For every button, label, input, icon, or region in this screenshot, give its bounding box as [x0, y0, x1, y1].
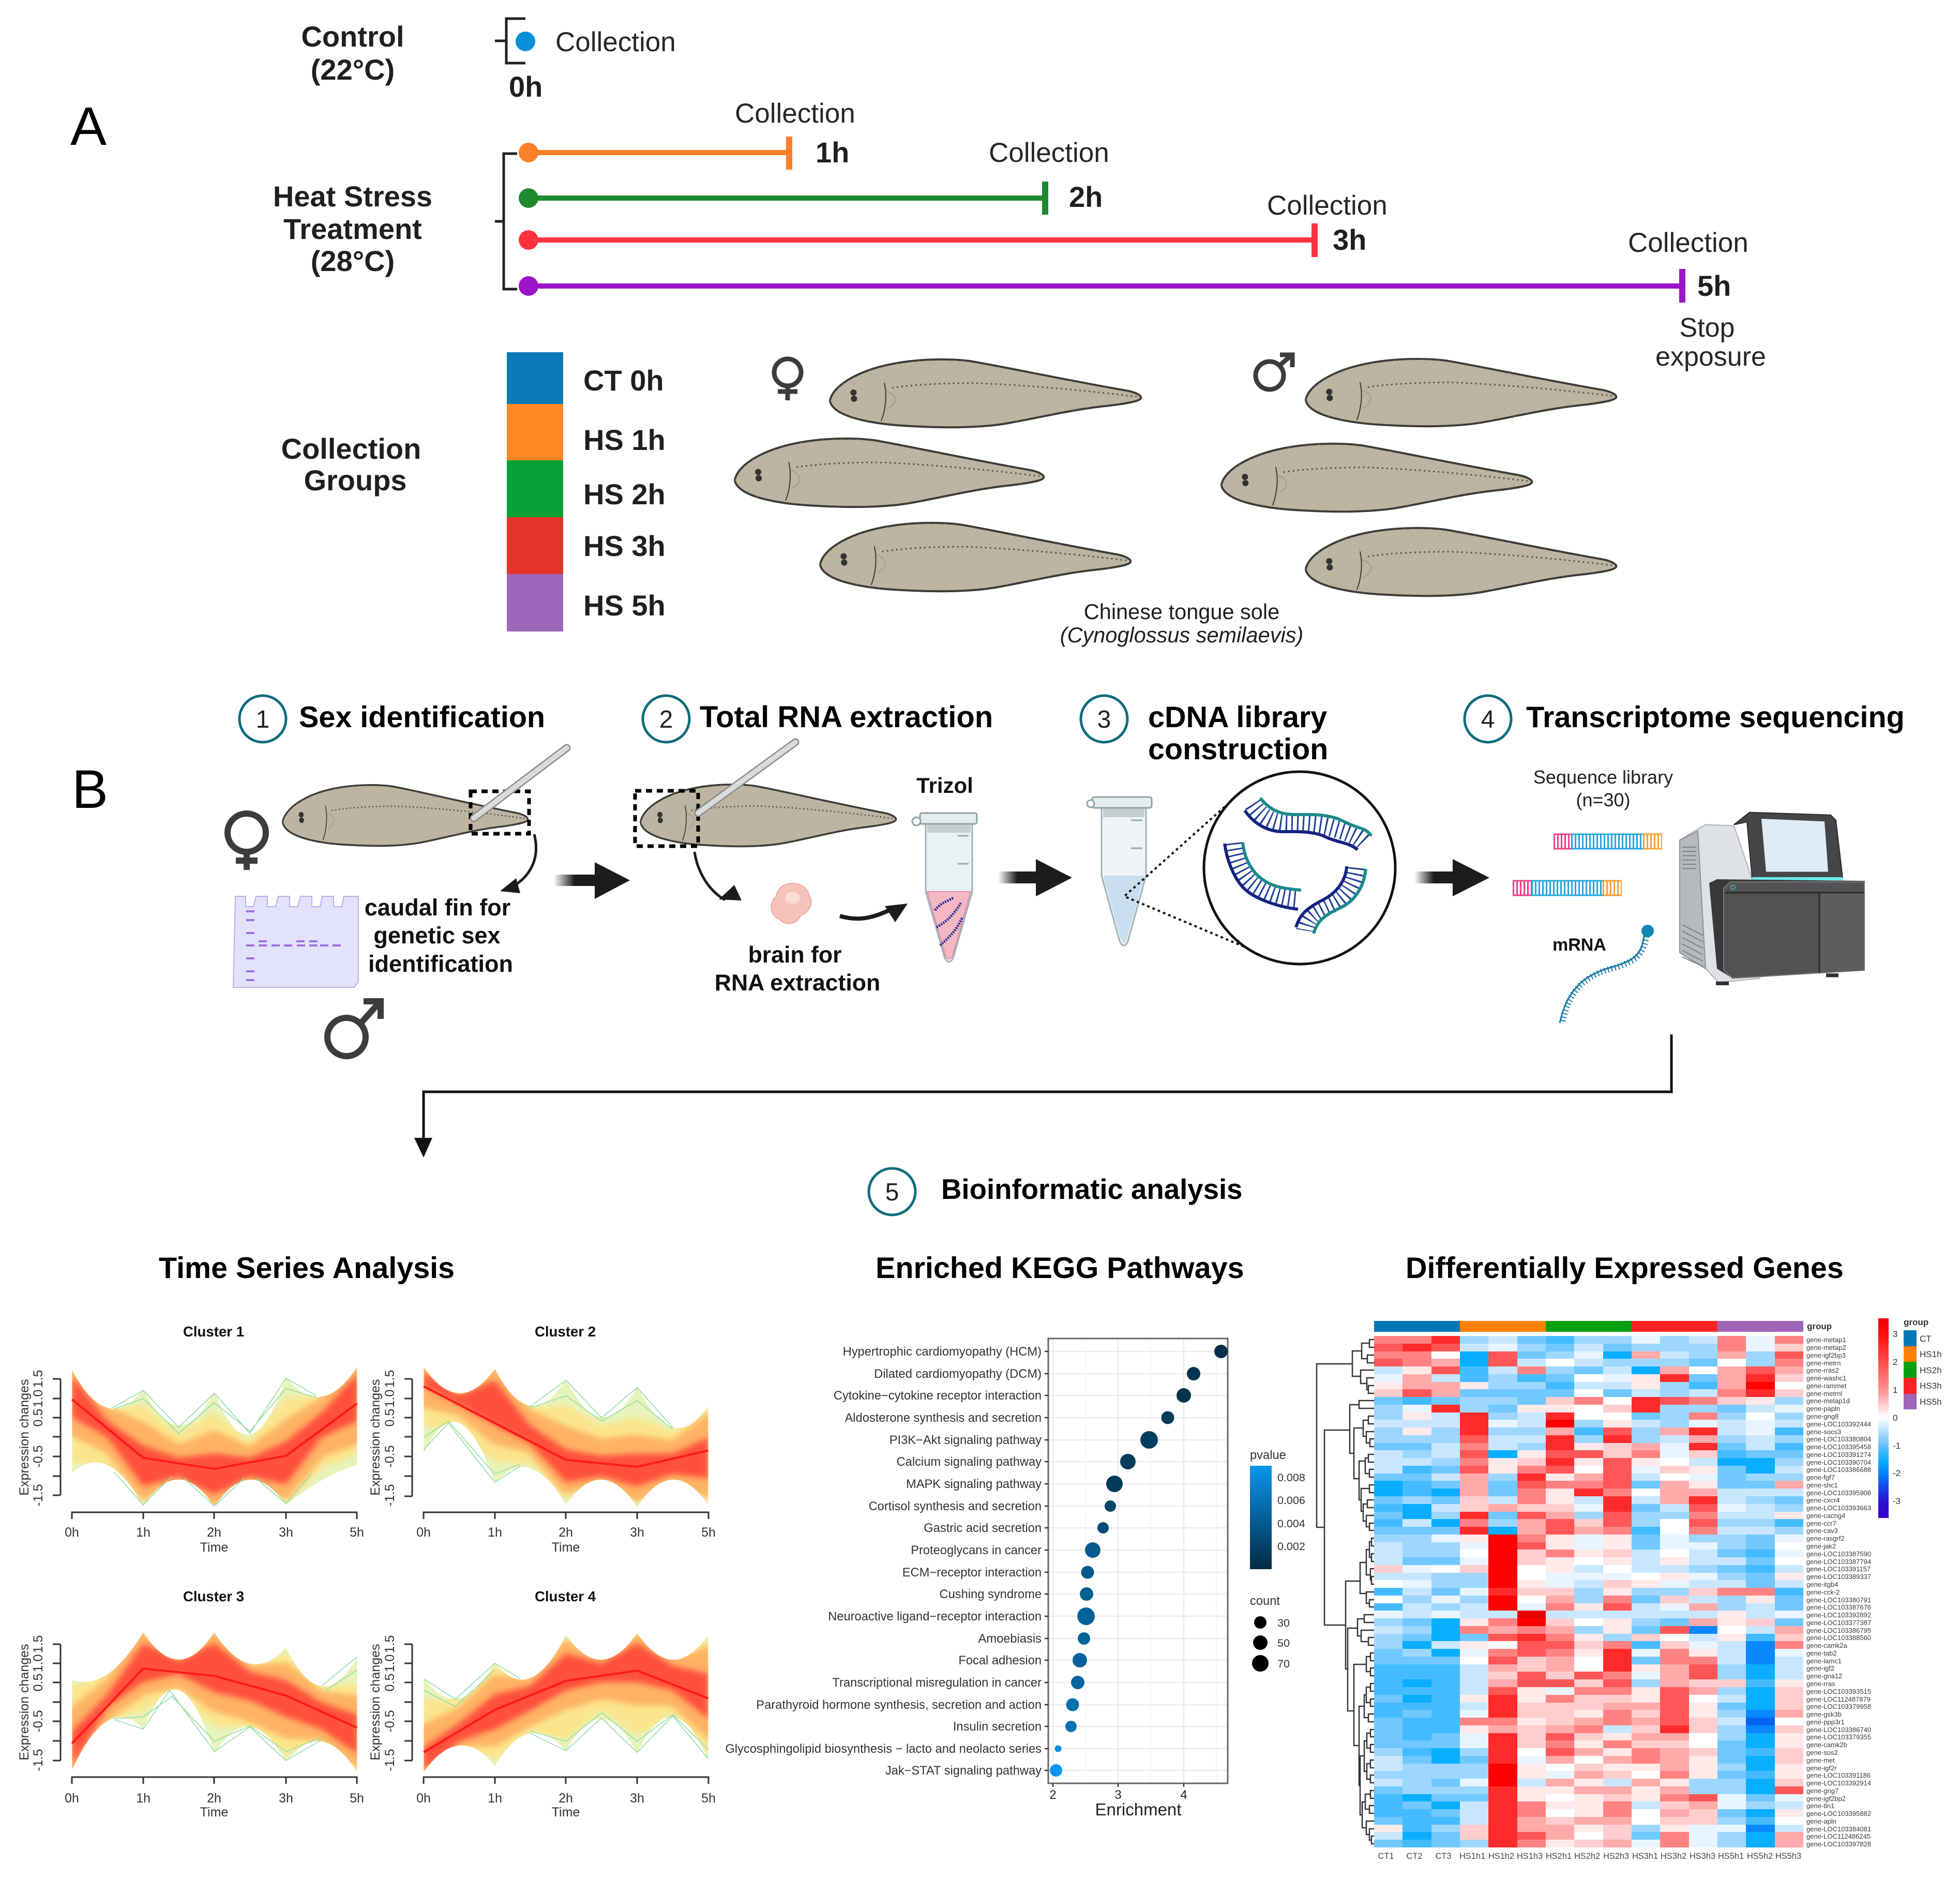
sequence library fragments	[1513, 834, 1662, 895]
chart: cluster 4: 1.5	[383, 1635, 397, 1653]
arrow: brain to tube	[840, 904, 908, 922]
timeline 5h: 5h	[1697, 269, 1731, 302]
heatmap gene labels: gene-socs3	[1806, 1428, 1841, 1436]
chart: cluster 1	[17, 1324, 364, 1555]
heatmap sample labels: HS3h1	[1632, 1852, 1658, 1861]
count legend: count	[1250, 1595, 1280, 1608]
heat stress treatment label: (28°C)	[311, 245, 395, 277]
chart: cluster 3: 5h	[350, 1791, 364, 1806]
fish with caudal fin selection	[283, 748, 567, 846]
chart: cluster 2: 3h	[630, 1525, 644, 1540]
big arrow 2	[998, 859, 1072, 896]
chart: cluster 2: 0.5	[383, 1409, 397, 1426]
chart: cluster 1: 1.5	[31, 1370, 46, 1388]
step 2 heading: Total RNA extraction	[700, 700, 993, 734]
heatmap gene labels: gene-LOC103391157	[1806, 1565, 1871, 1573]
species caption: (Cynoglossus semilaevis)	[1060, 623, 1303, 647]
chart: cluster 4: Time	[552, 1805, 580, 1820]
chart: cluster 3: 0h	[65, 1791, 79, 1806]
heatmap gene labels: gene-LOC103380804	[1806, 1435, 1871, 1443]
heatmap gene labels: gene-cacng4	[1806, 1512, 1845, 1520]
chart: cluster 4: -0.5	[383, 1710, 397, 1733]
heatmap gene labels: gene-shc1	[1806, 1481, 1838, 1489]
KEGG dot plot: Calcium signaling pathway	[897, 1455, 1042, 1469]
chart: cluster 1: Cluster 1	[183, 1324, 244, 1340]
heatmap sample labels: HS1h3	[1517, 1852, 1543, 1861]
chart: cluster 3: 3h	[279, 1791, 293, 1806]
heatmap gene labels: gene-LOC103395882	[1806, 1810, 1871, 1817]
heatmap gene labels: gene-gng7	[1806, 1787, 1838, 1795]
big arrow 1	[554, 862, 630, 899]
heatmap sample labels: CT3	[1436, 1852, 1451, 1861]
brain label: RNA extraction	[715, 970, 880, 996]
trizol label: Trizol	[916, 773, 973, 798]
heatmap gene labels: gene-apln	[1806, 1817, 1836, 1825]
timeline 3h	[519, 190, 1388, 257]
heatmap gene labels: gene-LOC103388560	[1806, 1634, 1871, 1642]
collection groups colour legend: HS 1h	[583, 424, 666, 456]
chart: cluster 4: 1h	[488, 1791, 502, 1806]
heatmap gene labels: gene-LOC103392444	[1806, 1420, 1871, 1428]
chart: cluster 3: 1.0	[31, 1655, 46, 1672]
heatmap group legend	[1904, 1317, 1942, 1409]
heatmap gene labels	[1806, 1336, 1871, 1848]
chart: cluster 4: 5h	[701, 1791, 716, 1806]
icon: trizol tube	[912, 813, 977, 962]
heatmap gene labels: gene-igf2bp3	[1806, 1351, 1846, 1359]
heatmap group legend: group	[1904, 1317, 1928, 1327]
step 1 heading: Sex identification	[299, 701, 545, 734]
count legend: 30	[1277, 1617, 1290, 1629]
icon: cDNA tube	[1087, 797, 1152, 945]
heatmap sample labels	[1378, 1852, 1801, 1861]
heatmap group legend: HS1h	[1920, 1349, 1942, 1359]
arrow: fin to gel	[500, 834, 536, 893]
KEGG dot plot	[725, 1339, 1228, 1819]
chart: cluster 4: 0h	[416, 1791, 431, 1806]
icon: mRNA strand	[1560, 925, 1654, 1023]
chart: cluster 4: -1.5	[383, 1749, 397, 1771]
heatmap gene labels: gene-papln	[1806, 1405, 1840, 1412]
heatmap gene labels: gene-tab2	[1806, 1649, 1837, 1657]
icon: female symbol stem	[778, 386, 797, 400]
zoom circle with cDNA strands	[1204, 772, 1395, 964]
KEGG dot plot: Proteoglycans in cancer	[911, 1544, 1042, 1557]
panel letter B: B	[72, 759, 108, 820]
chart: cluster 1: -0.5	[31, 1445, 46, 1468]
heatmap gene labels: gene-metap1d	[1806, 1397, 1850, 1405]
gel electrophoresis	[233, 896, 358, 987]
KEGG dot plot: Cortisol synthesis and secretion	[869, 1500, 1042, 1513]
chart: cluster 2: Cluster 2	[535, 1324, 596, 1340]
panel letter A: A	[70, 96, 107, 157]
KEGG dot plot: Parathyroid hormone synthesis, secretion and action	[756, 1698, 1042, 1712]
step 1 heading	[239, 696, 545, 742]
chart: cluster 2: 0h	[416, 1525, 431, 1540]
heatmap gene labels: gene-camk2a	[1806, 1642, 1848, 1649]
count legend: 70	[1277, 1658, 1290, 1670]
stop exposure note: Stop	[1680, 313, 1735, 343]
heatmap gene labels: gene-LOC103387794	[1806, 1558, 1871, 1566]
KEGG dot plot: Cushing syndrome	[939, 1588, 1042, 1601]
chart: cluster 2: Time	[552, 1540, 580, 1555]
heatmap gene labels: gene-LOC103392914	[1806, 1779, 1871, 1787]
chart: cluster 3	[17, 1588, 364, 1820]
timeline 1h: 1h	[816, 136, 849, 169]
heatmap gene labels: gene-LOC103393515	[1806, 1688, 1871, 1695]
timeline 3h: Collection	[1267, 190, 1388, 221]
chart: cluster 2: 1h	[488, 1525, 502, 1540]
timeline 3h: 3h	[1333, 223, 1366, 256]
step 4 heading: Transcriptome sequencing	[1526, 701, 1905, 734]
heatmap colour scale: -3	[1893, 1496, 1901, 1506]
heatmap gene labels: gene-metrn	[1806, 1359, 1841, 1367]
chart: cluster 4: 0.5	[383, 1674, 397, 1691]
chart: cluster 1: 1h	[136, 1525, 150, 1540]
caudal fin label: identification	[368, 951, 513, 977]
heatmap gene labels: gene-gsk3b	[1806, 1710, 1842, 1718]
chart: cluster 3: 1.5	[31, 1635, 46, 1653]
heatmap gene labels: gene-LOC103389337	[1806, 1573, 1871, 1581]
heatmap gene labels: gene-LOC103384081	[1806, 1825, 1871, 1833]
KEGG dot plot: Aldosterone synthesis and secretion	[845, 1411, 1042, 1425]
KEGG dot plot: Transcriptional misregulation in cancer	[832, 1676, 1042, 1690]
KEGG dot plot: ECM−receptor interaction	[902, 1566, 1042, 1580]
timeline 2h	[519, 138, 1109, 215]
heatmap colour scale: 0	[1893, 1413, 1897, 1423]
heatmap gene labels: gene-cck-2	[1806, 1588, 1840, 1596]
KEGG dot plot: 2	[1049, 1788, 1057, 1802]
DEG title: Differentially Expressed Genes	[1406, 1252, 1844, 1285]
KEGG dot plot: Insulin secretion	[953, 1720, 1042, 1734]
heatmap group legend: HS5h	[1920, 1397, 1942, 1407]
timeline 5h	[519, 228, 1748, 303]
fish with brain selection	[635, 742, 896, 846]
KEGG dot plot: Hypertrophic cardiomyopathy (HCM)	[843, 1345, 1042, 1359]
heatmap gene labels: gene-ccr7	[1806, 1520, 1836, 1527]
chart: cluster 3: Cluster 3	[183, 1588, 244, 1604]
chart: cluster 4: 2h	[559, 1791, 573, 1806]
heatmap gene labels: gene-LOC103395906	[1806, 1489, 1871, 1497]
icon: male symbol	[1256, 355, 1292, 389]
heatmap colour scale: 1	[1893, 1385, 1897, 1395]
count legend: 50	[1277, 1637, 1290, 1649]
control timeline: Collection	[555, 27, 676, 57]
chart: cluster 4: 3h	[630, 1791, 644, 1806]
chart: cluster 1: Expression changes	[17, 1379, 32, 1496]
heatmap gene labels: gene-LOC103387676	[1806, 1603, 1871, 1611]
control timeline	[495, 19, 676, 103]
caudal fin label: genetic sex	[373, 922, 501, 949]
control group label: (22°C)	[311, 53, 395, 86]
heatmap sample labels: HS1h2	[1488, 1852, 1514, 1861]
step 3 heading	[1081, 696, 1328, 766]
chart: cluster 4: Expression changes	[368, 1644, 383, 1761]
collection groups colour legend: HS 3h	[583, 530, 666, 562]
big arrow 3	[1414, 859, 1489, 896]
heatmap colour scale: -2	[1893, 1468, 1901, 1478]
heat stress treatment label: Heat Stress	[273, 180, 432, 213]
species caption: Chinese tongue sole	[1084, 599, 1279, 624]
brain label: brain for	[748, 942, 841, 968]
timeline 1h: Collection	[735, 98, 855, 129]
heatmap gene labels: gene-sos2	[1806, 1749, 1838, 1756]
panel B: workflow	[72, 696, 1905, 1056]
chart: cluster 2: 1.0	[383, 1390, 397, 1407]
collection groups label: Collection	[281, 432, 421, 465]
control timeline: 0h	[509, 70, 542, 103]
p-value legend: 0.006	[1277, 1494, 1305, 1507]
heatmap colour scale: 3	[1893, 1329, 1897, 1339]
heatmap sample labels: CT1	[1378, 1852, 1394, 1861]
chart: cluster 2: -1.5	[383, 1484, 397, 1507]
icon: male symbol large	[327, 1001, 381, 1056]
control group label: Control	[301, 20, 404, 53]
icon: sequencer machine	[1680, 813, 1865, 985]
KEGG dot plot: Focal adhesion	[958, 1654, 1042, 1667]
heatmap gene labels: gene-LOC103391274	[1806, 1451, 1871, 1459]
heatmap gene labels: gene-LOC103390704	[1806, 1459, 1871, 1466]
collection groups label: Groups	[304, 464, 407, 497]
heatmap gene labels: gene-met	[1806, 1756, 1835, 1764]
heatmap gene labels: gene-gna12	[1806, 1672, 1842, 1680]
count legend	[1250, 1595, 1290, 1672]
heatmap gene labels: gene-LOC103397828	[1806, 1840, 1871, 1848]
chart: cluster 3: -1.5	[31, 1749, 46, 1771]
heatmap sample labels: HS2h1	[1546, 1852, 1572, 1861]
p-value legend: 0.008	[1277, 1471, 1305, 1484]
chart: cluster 1: 0h	[65, 1525, 79, 1540]
heatmap gene labels: gene-cav3	[1806, 1527, 1838, 1535]
heatmap gene labels: gene-LOC103387590	[1806, 1550, 1871, 1558]
heatmap gene labels: gene-ppp3r1	[1806, 1718, 1845, 1726]
heatmap gene labels: gene-LOC103379355	[1806, 1733, 1871, 1741]
KEGG dot plot: PI3K−Akt signaling pathway	[889, 1434, 1042, 1447]
heatmap sample labels: HS5h3	[1775, 1852, 1801, 1861]
heatmap gene labels: gene-igf2r	[1806, 1764, 1837, 1772]
heatmap gene labels: gene-LOC103386795	[1806, 1627, 1871, 1634]
chart: cluster 1: 3h	[279, 1525, 293, 1540]
heatmap gene labels: gene-LOC103392892	[1806, 1611, 1871, 1619]
chart: cluster 3: Time	[200, 1805, 228, 1820]
male fish group	[1222, 359, 1616, 596]
heatmap gene labels: gene-jak2	[1806, 1542, 1836, 1550]
heatmap gene labels: gene-LOC103386740	[1806, 1726, 1871, 1734]
heatmap gene labels: gene-lamc1	[1806, 1657, 1842, 1665]
chart: cluster 2: Expression changes	[368, 1379, 383, 1496]
heatmap cells	[1374, 1336, 1803, 1847]
p-value legend: pvalue	[1250, 1449, 1286, 1462]
heatmap gene labels: gene-gng8	[1806, 1412, 1838, 1420]
heatmap gene labels: gene-metap1	[1806, 1336, 1846, 1344]
heatmap gene labels: gene-LOC103379958	[1806, 1703, 1871, 1710]
KEGG dot plot: Cytokine−cytokine receptor interaction	[834, 1389, 1042, 1403]
sequence library label: (n=30)	[1576, 789, 1631, 810]
heatmap sample labels: CT2	[1407, 1852, 1422, 1861]
heatmap gene labels: gene-itgb4	[1806, 1581, 1838, 1588]
stop exposure note: exposure	[1655, 342, 1766, 372]
KEGG dot plot: Gastric acid secretion	[924, 1522, 1042, 1535]
chart: cluster 1: 1.0	[31, 1390, 46, 1407]
timeline 2h: 2h	[1069, 181, 1103, 213]
timeline 2h: Collection	[989, 138, 1109, 168]
chart: cluster 2: 2h	[559, 1525, 573, 1540]
heatmap group annotation bar	[1374, 1321, 1832, 1332]
chart: cluster 3: Expression changes	[17, 1644, 32, 1761]
heatmap gene labels: gene-LOC112486245	[1806, 1832, 1871, 1840]
heatmap gene labels: gene-rammet	[1806, 1382, 1847, 1390]
collection groups colour legend: CT 0h	[583, 364, 664, 397]
heatmap colour scale: -1	[1893, 1441, 1901, 1451]
heatmap gene labels: gene-fgf7	[1806, 1474, 1835, 1481]
panel A: experimental design	[70, 19, 1766, 647]
chart: cluster 4: Cluster 4	[535, 1588, 596, 1604]
step 5 heading: Bioinformatic analysis	[941, 1174, 1243, 1205]
step 5 heading	[869, 1168, 1243, 1215]
heatmap dendrogram	[1317, 1340, 1374, 1844]
connector arrow to bioinformatic analysis	[414, 1034, 1671, 1158]
collection groups colour legend	[507, 352, 666, 632]
timeline 5h: Collection	[1628, 228, 1748, 258]
KEGG dot plot: 3	[1114, 1788, 1122, 1802]
heatmap gene labels: gene-tln1	[1806, 1802, 1834, 1810]
chart: cluster 2: 1.5	[383, 1370, 397, 1388]
chart: cluster 4: 1.0	[383, 1655, 397, 1672]
heatmap gene labels: gene-cxcr4	[1806, 1496, 1840, 1504]
heatmap gene labels: gene-LOC103386688	[1806, 1466, 1871, 1474]
step 2 heading: 2	[659, 706, 673, 733]
chart: cluster 1: -1.5	[31, 1484, 46, 1507]
step 5 heading: 5	[885, 1179, 899, 1206]
KEGG dot plot: Dilated cardiomyopathy (DCM)	[874, 1367, 1042, 1381]
heatmap colour scale	[1878, 1318, 1901, 1518]
heatmap gene labels: gene-LOC103377387	[1806, 1619, 1871, 1627]
heatmap sample labels: HS2h3	[1603, 1852, 1629, 1861]
step 1 heading: 1	[256, 706, 269, 733]
heatmap group legend: HS3h	[1920, 1381, 1942, 1391]
chart: cluster 1: 2h	[207, 1525, 221, 1540]
step 3 heading: cDNA library	[1148, 701, 1327, 734]
chart: cluster 4	[368, 1588, 717, 1820]
caudal fin label: caudal fin for	[365, 894, 510, 921]
KEGG dot plot: Enrichment	[1095, 1800, 1181, 1819]
heatmap sample labels: HS3h2	[1661, 1852, 1686, 1861]
zoom lines	[1124, 807, 1251, 950]
heatmap gene labels: gene-metap2	[1806, 1344, 1846, 1351]
collection groups colour legend: HS 2h	[583, 478, 666, 510]
heatmap sample labels: HS2h2	[1574, 1852, 1600, 1861]
chart: cluster 3: 2h	[207, 1791, 221, 1806]
chart: cluster 2: 5h	[701, 1525, 716, 1540]
heatmap gene labels: gene-metrnl	[1806, 1390, 1842, 1397]
chart: cluster 3: -0.5	[31, 1710, 46, 1733]
heatmap group legend: HS2h	[1920, 1365, 1942, 1375]
heatmap gene labels: gene-LOC112487879	[1806, 1695, 1871, 1703]
icon: female ring	[774, 359, 801, 386]
heatmap sample labels: HS1h1	[1459, 1852, 1485, 1861]
sequence library label: Sequence library	[1533, 766, 1673, 788]
heatmap colour scale: 2	[1893, 1357, 1897, 1367]
chart: cluster 2	[368, 1324, 717, 1555]
heatmap gene labels: gene-rasgrf2	[1806, 1535, 1845, 1542]
icon: brain tissue	[771, 883, 811, 924]
p-value legend	[1250, 1449, 1305, 1569]
heat stress bracket	[495, 154, 517, 289]
step 4 heading: 4	[1481, 706, 1495, 733]
time series title: Time Series Analysis	[159, 1252, 455, 1285]
heatmap gene labels: gene-rras	[1806, 1680, 1835, 1688]
heatmap gene labels: gene-LOC103393663	[1806, 1504, 1871, 1512]
heatmap gene labels: gene-igf2	[1806, 1664, 1834, 1672]
heatmap gene labels: gene-rras2	[1806, 1366, 1839, 1374]
heat stress treatment label: Treatment	[283, 213, 422, 245]
timeline 1h	[519, 98, 855, 170]
heatmap gene labels: gene-igf2bp2	[1806, 1795, 1846, 1802]
chart: cluster 3: 1h	[136, 1791, 150, 1806]
step 3 heading: 3	[1097, 706, 1111, 733]
KEGG dot plot: Jak−STAT signaling pathway	[885, 1764, 1042, 1778]
step 2 heading	[643, 696, 993, 742]
KEGG dot plot: 4	[1180, 1788, 1187, 1802]
heatmap group annotation bar: group	[1807, 1321, 1832, 1331]
KEGG dot plot: MAPK signaling pathway	[906, 1478, 1042, 1491]
heatmap gene labels: gene-LOC103391186	[1806, 1771, 1871, 1779]
step 4 heading	[1465, 696, 1905, 742]
p-value legend: 0.002	[1277, 1540, 1305, 1553]
heatmap sample labels: HS5h2	[1747, 1852, 1773, 1861]
heatmap gene labels: gene-washc1	[1806, 1374, 1846, 1382]
chart: cluster 1: 5h	[350, 1525, 364, 1540]
chart: cluster 2: -0.5	[383, 1445, 397, 1468]
KEGG title: Enriched KEGG Pathways	[876, 1252, 1244, 1285]
heatmap sample labels: HS5h1	[1718, 1852, 1744, 1861]
chart: cluster 1: Time	[200, 1540, 228, 1555]
chart: cluster 1: 0.5	[31, 1409, 46, 1426]
collection groups colour legend: HS 5h	[583, 589, 666, 622]
chart: cluster 3: 0.5	[31, 1674, 46, 1691]
p-value legend: 0.004	[1277, 1517, 1305, 1530]
KEGG dot plot: Neuroactive ligand−receptor interaction	[828, 1610, 1042, 1624]
icon: female symbol large	[228, 814, 266, 870]
heatmap sample labels: HS3h3	[1690, 1852, 1715, 1861]
female fish group	[735, 359, 1141, 591]
step 3 heading: construction	[1148, 733, 1328, 766]
heatmap gene labels: gene-LOC103380791	[1806, 1596, 1871, 1604]
arrow: fish to brain	[695, 852, 742, 900]
heatmap gene labels: gene-LOC103395458	[1806, 1443, 1871, 1451]
KEGG dot plot: Glycosphingolipid biosynthesis − lacto and neolacto series	[725, 1742, 1042, 1756]
KEGG dot plot: Amoebiasis	[978, 1632, 1042, 1646]
heatmap gene labels: gene-camk2b	[1806, 1741, 1847, 1749]
mRNA label: mRNA	[1552, 935, 1606, 955]
heatmap group legend: CT	[1920, 1334, 1932, 1344]
